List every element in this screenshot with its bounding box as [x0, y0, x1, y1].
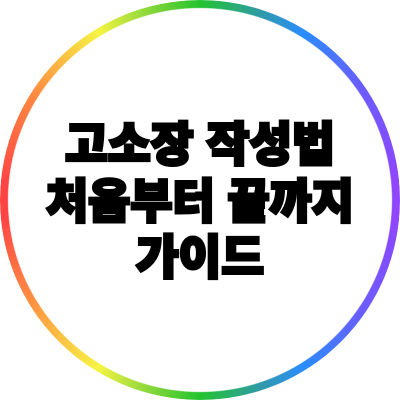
title line 2: 처음부터 끝까지: [46, 175, 354, 228]
title line 1: 고소장 작성법: [65, 118, 335, 171]
title line 3: 가이드: [136, 231, 264, 284]
